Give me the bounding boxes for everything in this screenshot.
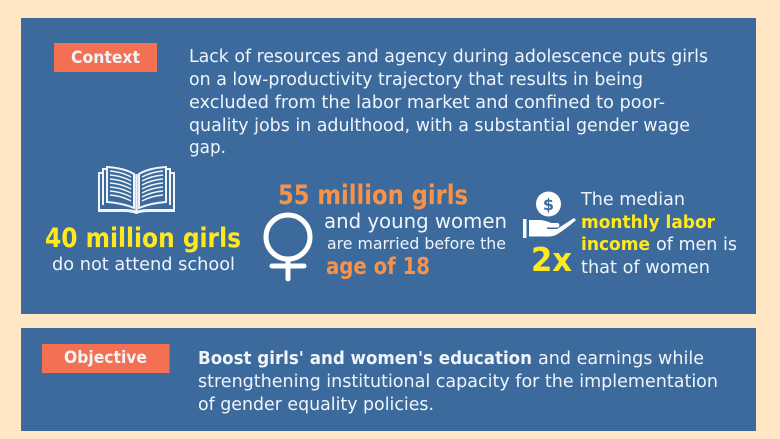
stat: 40 million girls — [45, 223, 241, 275]
stat: 40 million girls: 40 million girls — [45, 223, 241, 254]
stat: 2x labor income — [531, 189, 737, 279]
text block: objective description: Boost girls' and women's education — [198, 348, 532, 369]
stat: 55 million girls: are married before the — [327, 234, 506, 253]
stat: 2x labor income: The median — [580, 189, 685, 210]
text block: context description — [189, 46, 708, 158]
stat: 55 million girls — [278, 180, 507, 280]
text block: objective description: of gender equality policies. — [198, 394, 434, 415]
panel: context — [21, 18, 756, 314]
text block: objective description: strengthening institutional capacity for the implementation — [198, 371, 718, 392]
badge: context — [54, 43, 157, 72]
icon: female symbol — [266, 215, 310, 279]
stat: 55 million girls: and young women — [324, 209, 507, 233]
stat: 40 million girls: do not attend school — [52, 254, 235, 275]
text block: context description: Lack of resources and agency during adolescence puts girls — [189, 46, 708, 67]
stat: 55 million girls: age of 18 — [326, 254, 430, 280]
badge: objective: Objective — [64, 348, 147, 367]
text block: objective description — [198, 348, 718, 415]
stat: 55 million girls: 55 million girls — [278, 180, 468, 211]
stat: 2x labor income: of men is — [656, 234, 737, 255]
text block: objective description: and earnings while — [538, 348, 704, 369]
stat: 2x labor income: 2x — [531, 240, 572, 279]
stat: 2x labor income: income — [581, 235, 650, 255]
stat: 2x labor income: that of women — [581, 257, 710, 278]
icon: open book — [98, 167, 175, 212]
badge: objective — [42, 344, 170, 373]
text block: context description: gap. — [189, 137, 226, 158]
icon: hand holding coin — [523, 192, 576, 238]
badge: context: Context — [71, 48, 140, 67]
text block: context description: on a low-productivity trajectory that results in being — [189, 69, 643, 90]
stat: 2x labor income: monthly labor — [581, 213, 715, 233]
icon: hand holding coin: $ — [543, 195, 554, 214]
text block: context description: excluded from the labor market and confined to poor- — [189, 92, 665, 113]
text block: context description: quality jobs in adulthood, with a substantial gender wage — [189, 115, 690, 136]
panel: objective — [21, 328, 756, 431]
